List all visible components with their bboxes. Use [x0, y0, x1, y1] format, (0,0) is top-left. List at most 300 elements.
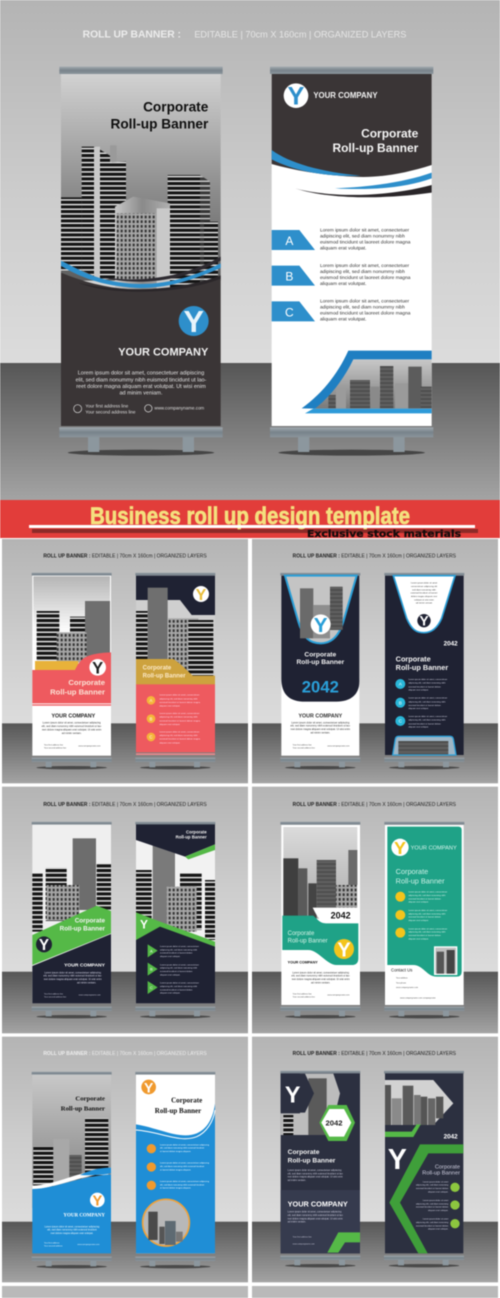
title: Roll-up Banner: [396, 876, 445, 885]
contact row: www.companyname.com: [154, 406, 204, 411]
list A: euismod tincidunt ut laoreet dolore: [408, 685, 442, 688]
list A: adipiscing elit, sed diam nonummy: [416, 1184, 449, 1187]
logo: Y: [39, 937, 49, 954]
list A: adipiscing elit, sed diam nonummy nibh: [160, 948, 198, 951]
body: Lorem ipsum dolor sit amet, consectetuer adipiscing: [292, 971, 350, 974]
body: Lorem ipsum dolor sit amet, consectetuer adipiscing: [45, 1225, 100, 1228]
list C: [416, 1218, 460, 1231]
title: Corporate: [288, 931, 315, 937]
logo circle: [284, 83, 308, 111]
list B: elit, sed diam nonummy nibh euismod tincidunt: [160, 1165, 205, 1168]
notch text: Lorem ipsum dolor sit amet: [411, 582, 438, 585]
list B: Lorem ipsum dolor sit amet, consectetuer: [408, 697, 448, 700]
item C tag and text: Lorem ipsum dolor sit amet, consectetuer: [320, 299, 410, 305]
list A: euismod tincidunt ut laoreet dolore: [416, 1187, 449, 1190]
list B: adipiscing elit, sed diam nonummy nibh: [408, 700, 446, 703]
right banner: [384, 1071, 464, 1267]
list C: euismod tincidunt ut laoreet dolore: [408, 722, 442, 725]
body: elit, sed diam nonummy nibh euismod tincidunt ut lao-: [42, 725, 102, 728]
title: Roll-up Banner: [296, 659, 345, 666]
list C: adipiscing elit, sed diam nonummy nibh: [159, 734, 198, 737]
list C: adipiscing elit, sed diam nonummy: [416, 1221, 449, 1224]
circular photo: [143, 1199, 189, 1246]
list C: Lorem ipsum dolor sit amet, consectetuer: [159, 730, 200, 733]
logo: [334, 939, 354, 961]
notch text: euismod tincidunt ut laoreet: [411, 592, 438, 595]
list C: euismod tincidunt ut laoreet dolore: [160, 988, 193, 991]
panel background: [252, 1037, 498, 1282]
banner title: Roll-up Banner: [332, 141, 419, 155]
left banner: [32, 573, 112, 769]
list C: C: [399, 719, 403, 724]
title: Corporate: [396, 867, 428, 876]
list C: [147, 730, 201, 744]
contact: Your second address line: [293, 746, 316, 749]
list A: Lorem ipsum dolor sit amet: [423, 1180, 449, 1183]
list A: aliquam erat volutpat.: [159, 705, 181, 708]
list C: euismod tincidunt ut laoreet dolore: [408, 934, 442, 937]
item A tag and text: [272, 227, 411, 251]
list C: adipiscing elit, sed diam nonummy nibh: [408, 719, 446, 722]
company name: YOUR COMPANY: [118, 346, 209, 358]
list B: Lorem ipsum dolor sit amet, consectetuer: [408, 909, 448, 912]
contact row: Your first address line: [85, 403, 129, 408]
list C: [147, 1180, 210, 1190]
contact: www.companyname.com: [327, 746, 350, 748]
company: YOUR COMPANY: [63, 1214, 105, 1219]
list A: [147, 694, 201, 708]
list B: Lorem ipsum dolor sit amet, consectetuer adipiscing: [160, 1162, 210, 1165]
company: YOUR COMPANY: [411, 846, 457, 852]
notch text: sed diam nonummy nibh: [412, 589, 437, 591]
logo: Y: [144, 1079, 154, 1095]
list B: aliquam erat volutpat.: [160, 973, 181, 976]
right banner: [135, 822, 215, 1018]
list B: Lorem ipsum dolor sit amet: [423, 1199, 449, 1202]
title: Roll-up Banner: [50, 687, 105, 696]
logo: Y: [337, 939, 351, 961]
item B tag and text: euismod tincidunt ut laoreet dolore magna: [320, 275, 411, 281]
title: Corporate: [186, 830, 207, 835]
list B: adipiscing elit, sed diam nonummy nibh: [408, 912, 446, 915]
item A tag and text: Lorem ipsum dolor sit amet, consectetuer: [320, 227, 410, 233]
logo: [193, 586, 209, 604]
item B tag and text: B: [285, 270, 293, 284]
title: Roll-up Banner: [143, 673, 186, 679]
title: Corporate: [68, 678, 105, 687]
contact: Your second address line: [44, 746, 67, 749]
left banner: [280, 573, 360, 769]
contact row: [74, 403, 204, 414]
list B: [416, 1199, 460, 1212]
year hexagon: 2042: [325, 1119, 343, 1128]
left banner: [32, 822, 112, 1018]
body: reet dolore magna aliquam erat volutpat. Ut wisi enim: [292, 978, 350, 981]
panel: green wedge banners: [2, 787, 248, 1033]
body: reet dolore magna aliquam erat volutpat. Ut wisi enim: [42, 728, 101, 731]
hero heading: roll up banner specs: ROLL UP BANNER :: [83, 29, 181, 40]
hero left roll-up banner: [59, 67, 223, 456]
list C: adipiscing elit, sed diam nonummy nibh: [160, 985, 198, 988]
green chevron: [389, 1144, 463, 1253]
red title ribbon: [0, 500, 500, 540]
year: 2042: [444, 1134, 458, 1141]
hero content: [59, 29, 433, 456]
skyline: [283, 850, 357, 918]
list A: A: [150, 948, 153, 953]
list B: euismod tincidunt ut laoreet dolore: [416, 1206, 449, 1209]
list A: adipiscing elit, sed diam nonummy nibh: [159, 697, 198, 700]
company: YOUR COMPANY: [64, 962, 106, 968]
contact: Your first address: [44, 1242, 59, 1245]
right banner: [384, 573, 464, 769]
list B: aliquam erat volutpat.: [428, 1209, 449, 1212]
item A tag and text: aliquam erat volutpat.: [320, 245, 366, 251]
list A: A: [399, 682, 403, 687]
contact: Your first address line: [44, 743, 64, 746]
list C: aliquam erat volutpat.: [428, 1228, 449, 1231]
title: Corporate: [143, 666, 172, 672]
contact block: Contact Us: [391, 968, 412, 973]
body: reet dolore magna aliquam erat volutpat. Ut wisi enim: [291, 728, 350, 731]
list A: [148, 944, 199, 958]
logo circle: Y: [183, 305, 204, 339]
panel heading: ROLL UP BANNER : EDITABLE | 70cm X 160cm | ORGANIZED LAYERS: [43, 1051, 207, 1057]
list B: B: [150, 716, 153, 721]
logo: [391, 838, 409, 858]
company: YOUR COMPANY: [288, 1200, 348, 1209]
panel: navy and cyan banners: [252, 539, 498, 783]
list B: adipiscing elit, sed diam nonummy nibh: [159, 716, 198, 719]
body: ad minim veniam.: [310, 732, 330, 735]
cropped start of next panel row: [2, 1286, 498, 1298]
dark lower panel with curve: [61, 273, 221, 426]
contact lines: Your phone: [396, 981, 407, 984]
list B: euismod tincidunt ut laoreet dolore: [408, 704, 442, 707]
list B: [395, 909, 448, 922]
list C: aliquam erat volutpat.: [408, 725, 429, 728]
title: Corporate: [75, 918, 105, 925]
V shaped photo: [285, 576, 357, 643]
list B: aliquam erat volutpat.: [408, 919, 429, 922]
body: ad minim veniam.: [62, 732, 82, 735]
left banner: [280, 822, 360, 1018]
body: Lorem ipsum dolor sit amet, consectetuer adipiscing: [44, 971, 102, 974]
list C: euismod tincidunt ut laoreet dolore magna: [159, 738, 201, 741]
body: Lorem ipsum dolor sit amet, consectetuer adipiscing: [288, 1169, 342, 1172]
photo: [281, 1074, 340, 1135]
body 2: Lorem ipsum dolor sit amet, consectetuer adipiscing: [288, 1211, 342, 1214]
contact: www.companyname.com: [77, 1244, 100, 1246]
list B: [147, 712, 201, 726]
contact row: Your second address line: [85, 409, 136, 414]
title: Corporate: [435, 1165, 460, 1171]
body: ad minim veniam.: [311, 981, 331, 984]
skyline illustration: [61, 145, 218, 297]
logo: Y: [314, 614, 328, 637]
body: elit, sed diam nonummy nibh euismod tincidunt ut lao-: [43, 975, 102, 978]
title: Roll-up Banner: [155, 1107, 201, 1115]
bottom skyline graphic: [302, 351, 432, 413]
item B tag and text: aliquam erat volutpat.: [320, 281, 366, 287]
logo: [141, 1079, 156, 1095]
list C: ut laoreet dolore magna aliquam.: [160, 1187, 191, 1190]
left banner: [32, 1072, 112, 1268]
logo circle: [179, 305, 209, 339]
list A: ut laoreet dolore magna aliquam.: [160, 1150, 191, 1153]
hero right roll-up banner: [270, 67, 433, 456]
panel: blue and orange banners: [2, 1037, 248, 1282]
body: elit, sed diam nonummy nibh euismod tincidunt ut lao-: [291, 975, 350, 978]
list C: Lorem ipsum dolor sit amet, consectetuer: [408, 715, 448, 718]
white banner sheet: [272, 74, 432, 426]
title: Roll-up Banner: [61, 1106, 105, 1113]
skyline: [37, 601, 110, 662]
list C: aliquam erat volutpat.: [159, 741, 181, 744]
list C: Lorem ipsum dolor sit amet, consectetuer: [160, 982, 199, 985]
logo: [36, 936, 52, 954]
list A: [395, 678, 448, 691]
contact lines: www.companyname.com: [396, 987, 418, 989]
list C: [148, 981, 199, 995]
body: reet dolore magna aliquam erat volutpat.: [51, 1232, 94, 1235]
list B: B: [399, 700, 402, 705]
skyline: [33, 1118, 108, 1187]
title: Roll-up Banner: [288, 938, 328, 944]
list A: Lorem ipsum dolor sit amet, consectetuer: [159, 694, 200, 697]
item A tag and text: euismod tincidunt ut laoreet dolore magna: [320, 239, 411, 245]
hero scene: wall and floor background: [0, 0, 500, 500]
contact: Your first address line: [293, 1235, 313, 1238]
title: Roll-up Banner: [288, 1158, 336, 1165]
hero heading: roll up banner specs: EDITABLE | 70cm X 160cm | ORGANIZED LAYERS: [194, 29, 406, 39]
title: Corporate: [288, 1149, 320, 1156]
list B: Lorem ipsum dolor sit amet, consectetuer: [160, 963, 199, 966]
list B: [395, 697, 448, 710]
item A tag and text: adipiscing elit, sed diam nonummy nibh: [320, 233, 405, 239]
banner title: Corporate: [143, 100, 209, 115]
contact: www.companyname.com: [79, 995, 101, 997]
blue and dark swooshes: [61, 257, 221, 292]
list C: Lorem ipsum dolor sit amet, consectetuer: [408, 927, 448, 930]
list B: adipiscing elit, sed diam nonummy: [416, 1202, 449, 1205]
photo: [385, 1080, 453, 1125]
list B: adipiscing elit, sed diam nonummy nibh: [160, 967, 198, 970]
list A: Lorem ipsum dolor sit amet, consectetuer adipiscing: [160, 1143, 210, 1146]
item B tag and text: [272, 263, 411, 287]
panel: teal and yellow banners: [252, 787, 498, 1033]
list A: elit, sed diam nonummy nibh euismod tincidunt: [160, 1147, 205, 1150]
hero heading: roll up banner specs: [83, 29, 406, 40]
notch text: consectetuer adipiscing elit: [411, 585, 438, 588]
contact: www.companyname.com: [78, 746, 101, 748]
logo circle: Y: [288, 83, 305, 111]
year: 2042: [331, 910, 351, 920]
body: ad minim veniam.: [288, 1180, 306, 1182]
body: elit, sed diam nonummy nibh euismod tincidunt: [47, 1229, 97, 1232]
panel: dark and green hexagon banners: [252, 1037, 498, 1282]
description paragraph: elit, sed diam nonummy nibh euismod tincidunt ut lao-: [76, 377, 207, 383]
panel heading: ROLL UP BANNER : EDITABLE | 70cm X 160cm | ORGANIZED LAYERS: [43, 554, 207, 560]
list A: adipiscing elit, sed diam nonummy nibh: [408, 894, 446, 897]
list B: aliquam erat volutpat.: [159, 723, 181, 726]
item C tag and text: euismod tincidunt ut laoreet dolore magna: [320, 311, 411, 317]
list C: adipiscing elit, sed diam nonummy nibh: [408, 931, 446, 934]
item C tag and text: [272, 299, 411, 323]
body: elit, sed diam nonummy nibh euismod tincidunt ut lao-: [290, 725, 350, 728]
list B: euismod tincidunt ut laoreet dolore: [160, 970, 193, 973]
panel: red and gold banners: [2, 539, 248, 783]
panel heading: ROLL UP BANNER : EDITABLE | 70cm X 160cm | ORGANIZED LAYERS: [43, 802, 207, 808]
item B tag and text: Lorem ipsum dolor sit amet, consectetuer: [320, 263, 410, 269]
bottom photo: [393, 736, 456, 755]
list C: [395, 715, 448, 728]
list A: aliquam erat volutpat.: [408, 901, 429, 904]
list A: euismod tincidunt ut laoreet dolore: [160, 952, 193, 955]
item C tag and text: C: [285, 306, 294, 320]
logo letter: Y: [140, 917, 148, 931]
list B: ut laoreet dolore magna aliquam.: [160, 1168, 191, 1171]
logo: [89, 658, 106, 677]
title: Corporate: [304, 652, 337, 659]
list C: aliquam erat volutpat.: [160, 992, 181, 995]
panel heading: ROLL UP BANNER : EDITABLE | 70cm X 160cm | ORGANIZED LAYERS: [293, 554, 456, 560]
description paragraph: reet dolore magna aliquam erat volutpat. Ut wisi enim: [76, 384, 206, 390]
year hexagon: [319, 1105, 355, 1141]
logo: Y: [92, 658, 103, 677]
body 2: ad minim veniam.: [288, 1222, 306, 1224]
right banner: [384, 822, 464, 1018]
contact lines: www.companyname.com companyname: [400, 998, 437, 1000]
logo: Y: [419, 613, 429, 629]
dark header with curve: [272, 74, 432, 177]
stand: left hero banner: [59, 67, 223, 456]
logo: Y: [92, 1193, 102, 1209]
skyline: [136, 843, 215, 940]
list A: Lorem ipsum dolor sit amet, consectetuer: [408, 678, 448, 681]
skyline: [136, 588, 215, 677]
company: YOUR COMPANY: [298, 714, 343, 720]
body 2: reet dolore magna aliquam erat volutpat. Ut wisi enim: [288, 1217, 343, 1220]
title: Roll-up Banner: [176, 835, 207, 840]
body: elit, sed diam nonummy nibh euismod tincidunt ut lao-: [288, 1172, 343, 1175]
body: reet dolore magna aliquam erat volutpat. Ut wisi enim: [44, 978, 102, 981]
item A tag and text: A: [285, 234, 293, 248]
contact: Your first address line: [44, 992, 64, 995]
wave: [32, 1168, 111, 1190]
left banner: [280, 1071, 360, 1267]
body 2: elit, sed diam nonummy nibh euismod tincidunt ut lao-: [288, 1214, 343, 1217]
logo: Y: [394, 838, 406, 858]
item C tag and text: aliquam erat volutpat.: [320, 317, 366, 323]
banner background gradient: [61, 74, 221, 281]
contact: Your second address line: [293, 995, 316, 998]
year: 2042: [444, 640, 458, 647]
list A: adipiscing elit, sed diam nonummy nibh: [408, 682, 446, 685]
ribbon title: Business roll up design template: [90, 503, 410, 530]
panel background: [2, 1037, 248, 1282]
logo letter: Y: [388, 1144, 407, 1176]
body: Lorem ipsum dolor sit amet, consectetuer adipiscing: [291, 721, 350, 724]
list A: euismod tincidunt ut laoreet dolore: [408, 897, 442, 900]
list B: euismod tincidunt ut laoreet dolore magna: [159, 719, 201, 722]
list A: Lorem ipsum dolor sit amet, consectetuer: [160, 945, 199, 948]
panel heading: ROLL UP BANNER : EDITABLE | 70cm X 160cm | ORGANIZED LAYERS: [293, 1051, 456, 1057]
skyline: [32, 838, 111, 932]
body: reet dolore magna aliquam erat volutpat. Ut wisi enim: [288, 1176, 343, 1179]
white notch: [393, 576, 455, 633]
list A: aliquam erat volutpat.: [428, 1190, 449, 1193]
list B: B: [150, 967, 153, 972]
list B: Lorem ipsum dolor sit amet, consectetuer: [159, 712, 200, 715]
body: Lorem ipsum dolor sit amet, consectetuer adipiscing: [43, 722, 101, 725]
logo hexagon: [281, 1074, 314, 1113]
panel heading: ROLL UP BANNER : EDITABLE | 70cm X 160cm | ORGANIZED LAYERS: [293, 802, 456, 808]
panel background: [2, 787, 248, 1033]
title: Roll-up Banner: [396, 663, 448, 672]
description paragraph: ad minim veniam.: [120, 390, 163, 396]
item B tag and text: adipiscing elit, sed diam nonummy nibh: [320, 269, 405, 275]
blue and black swooshes: [272, 150, 432, 197]
notch text: volutpat ut wisi enim: [414, 598, 434, 601]
title: Roll-up Banner: [422, 1170, 460, 1176]
list A: [416, 1180, 460, 1193]
contact: Your first address line: [293, 743, 313, 746]
list A: aliquam erat volutpat.: [160, 955, 181, 958]
logo: [311, 614, 331, 637]
banner title: Corporate: [361, 126, 419, 140]
list C: euismod tincidunt ut laoreet dolore: [416, 1224, 449, 1227]
panel background: [252, 787, 498, 1033]
title: Corporate: [171, 1096, 202, 1104]
list C: C: [149, 735, 153, 740]
list A: A: [150, 698, 153, 703]
description paragraph: Lorem ipsum dolor sit amet, consectetuer adipiscing: [78, 371, 204, 377]
list B: aliquam erat volutpat.: [408, 707, 429, 710]
contact: Your second address: [44, 1245, 63, 1248]
panel background: [2, 539, 248, 783]
list C: elit, sed diam nonummy nibh euismod tincidunt: [160, 1183, 205, 1186]
title: Corporate: [75, 1095, 105, 1102]
logo: Y: [196, 587, 207, 604]
right banner: [135, 573, 215, 769]
logo: [417, 613, 431, 629]
white wave line: [136, 1110, 215, 1139]
list C: Lorem ipsum dolor sit amet, consectetuer adipiscing: [160, 1180, 210, 1183]
contact: www.companyname.com: [293, 1243, 315, 1245]
contact: Your second address line: [44, 995, 67, 998]
company name: YOUR COMPANY: [313, 91, 378, 100]
photo inset: [434, 946, 457, 975]
list A: euismod tincidunt ut laoreet dolore magna: [159, 701, 201, 704]
list A: Lorem ipsum dolor sit amet, consectetuer: [408, 891, 448, 894]
stand: right hero banner: [270, 67, 433, 456]
list B: [148, 963, 199, 976]
list C: Lorem ipsum dolor sit amet: [423, 1218, 449, 1221]
company: YOUR COMPANY: [288, 960, 318, 964]
ribbon subtitle: Exclusive stock materials: [307, 529, 461, 540]
list C: aliquam erat volutpat.: [408, 937, 429, 940]
list C: C: [150, 985, 153, 990]
title: Roll-up Banner: [60, 925, 106, 932]
company: YOUR COMPANY: [51, 713, 96, 719]
list B: euismod tincidunt ut laoreet dolore: [408, 916, 442, 919]
green corner: [327, 1232, 360, 1253]
list A: [147, 1143, 210, 1153]
notch text: dolore magna aliquam erat: [411, 595, 437, 598]
item C tag and text: adipiscing elit, sed diam nonummy nibh: [320, 305, 405, 311]
contact: Your first address line: [293, 992, 313, 995]
